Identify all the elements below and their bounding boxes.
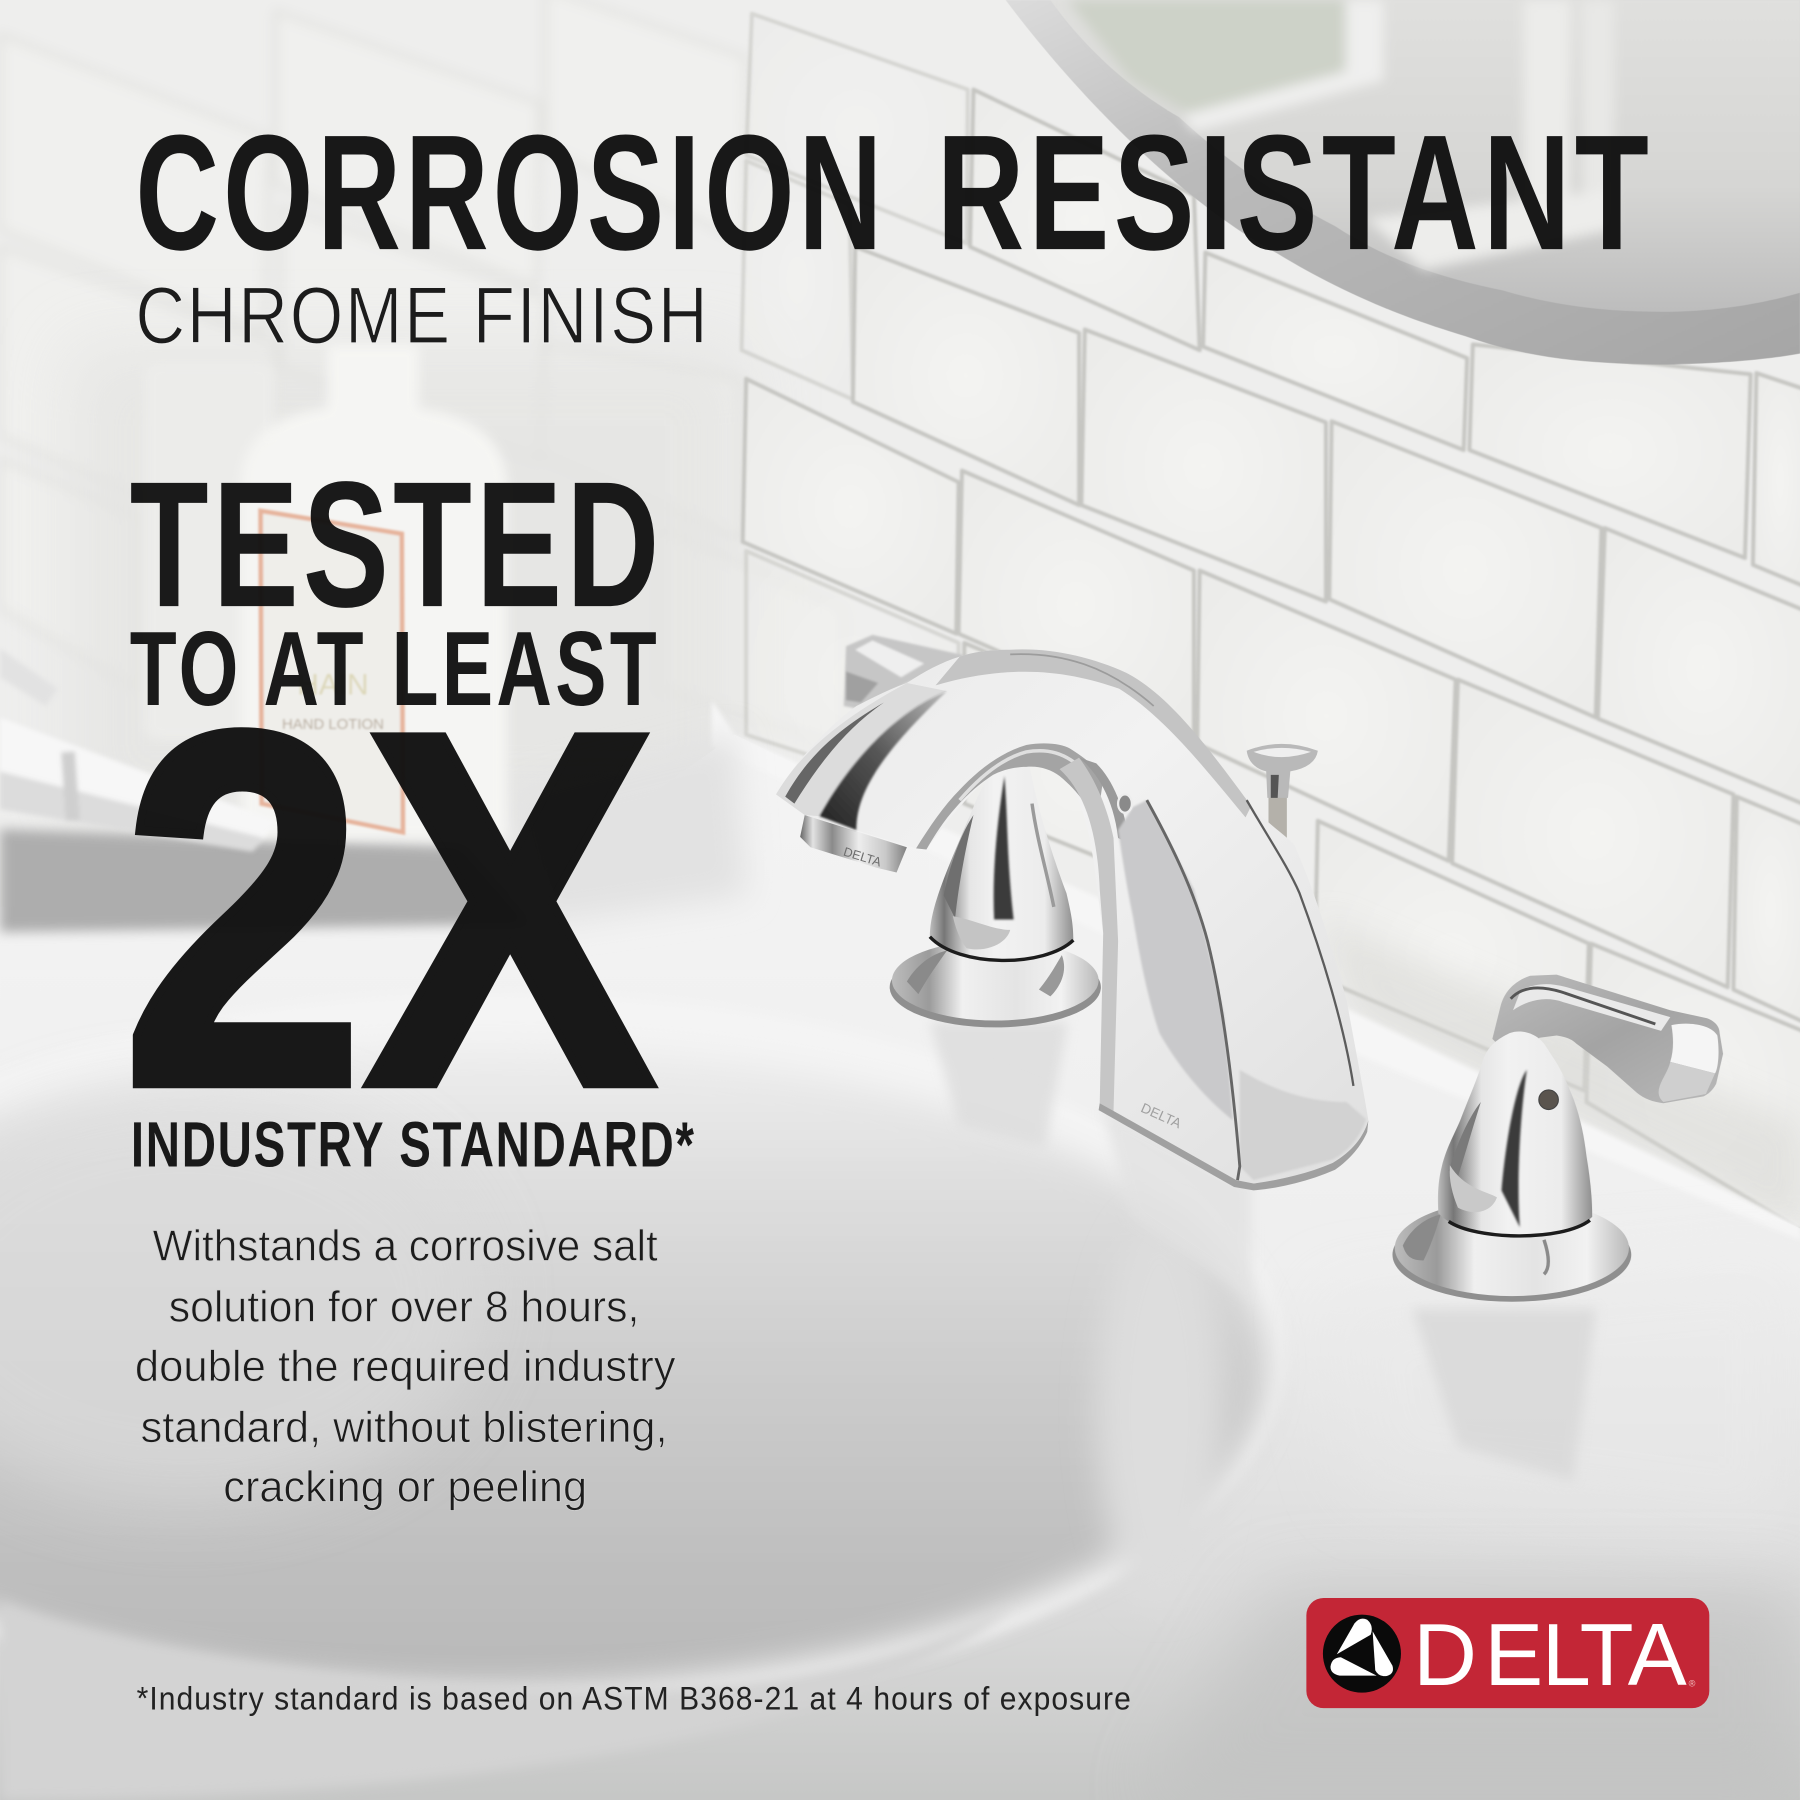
Delta logo badge bbox=[1306, 1598, 1709, 1708]
body description bbox=[135, 1222, 676, 1512]
spout inner limb bbox=[1060, 758, 1118, 1111]
spout hole bbox=[1118, 794, 1132, 813]
reflections on counter bbox=[930, 1022, 1596, 1481]
drain knob bbox=[1247, 744, 1318, 847]
spout base rim bbox=[1099, 1103, 1368, 1190]
right handle base bbox=[1392, 1208, 1631, 1302]
bottom swoop bbox=[1240, 1070, 1366, 1180]
lotion bottle bbox=[241, 344, 507, 838]
mirror bbox=[1006, 0, 1800, 364]
spout ridge lines bbox=[1147, 800, 1240, 1180]
blurred tray, bottles and brushes bbox=[0, 344, 746, 932]
heading: corrosion resistant: CORROSION bbox=[135, 100, 886, 284]
right handle bbox=[1392, 975, 1723, 1302]
tip outer stripe bbox=[776, 683, 947, 816]
tested: TESTED bbox=[130, 444, 664, 644]
lever end face bbox=[1670, 1024, 1719, 1073]
spout: DELTA bbox=[1139, 1100, 1184, 1132]
body description: cracking or peeling bbox=[223, 1464, 587, 1512]
left handle body bbox=[930, 760, 1073, 960]
lever top ridge bbox=[1513, 984, 1670, 1031]
claim block: tested to at least 2X bbox=[122, 444, 696, 1191]
handle screw hole bbox=[1539, 1090, 1558, 1110]
tip dark wedge bbox=[820, 691, 947, 830]
counter and sink bbox=[0, 700, 1800, 1800]
subway tile wall bbox=[0, 0, 1800, 1234]
spout bbox=[776, 649, 1368, 1190]
left handle base bbox=[890, 947, 1101, 1027]
body description: standard, without blistering, bbox=[141, 1404, 668, 1452]
aerator bbox=[800, 815, 907, 872]
rear bottle bbox=[143, 362, 276, 740]
chrome faucet bbox=[776, 635, 1723, 1481]
Delta triangle emblem bbox=[1323, 1615, 1401, 1693]
body description: Withstands a corrosive salt bbox=[153, 1222, 658, 1270]
rear lever bbox=[844, 635, 970, 709]
tray bbox=[0, 829, 528, 932]
Delta wordmark: DELTA bbox=[1413, 1605, 1687, 1704]
sink bowl bbox=[0, 1045, 1268, 1688]
top reflection band bbox=[936, 649, 1251, 817]
registered mark: ® bbox=[1689, 1678, 1696, 1688]
body description: double the required industry bbox=[135, 1343, 676, 1391]
bottle label bbox=[261, 511, 403, 832]
bottle label: HAIN bbox=[297, 669, 369, 702]
footnote: *Industry standard is based on ASTM B368-21 at 4 hours of exposure bbox=[137, 1680, 1132, 1716]
to at least: TO AT LEAST bbox=[130, 610, 660, 728]
subheading: chrome finish: CHROME FINISH bbox=[135, 271, 709, 361]
lower left panel bbox=[1118, 800, 1233, 1120]
sink lip highlight bbox=[0, 993, 1286, 1716]
bottle label: HAND LOTION bbox=[282, 716, 384, 733]
2X big number: 2X bbox=[122, 628, 658, 1191]
underside arch rim bbox=[916, 743, 1103, 849]
right handle body bbox=[1438, 1031, 1592, 1238]
spout body bbox=[776, 649, 1368, 1184]
body description: solution for over 8 hours, bbox=[169, 1283, 639, 1331]
right handle lever bbox=[1492, 975, 1723, 1103]
brushes bbox=[0, 649, 276, 852]
left handle bbox=[890, 760, 1101, 1027]
window reflection bbox=[1068, 0, 1614, 270]
industry standard: INDUSTRY STANDARD* bbox=[131, 1108, 696, 1180]
spout: DELTA bbox=[842, 845, 883, 870]
